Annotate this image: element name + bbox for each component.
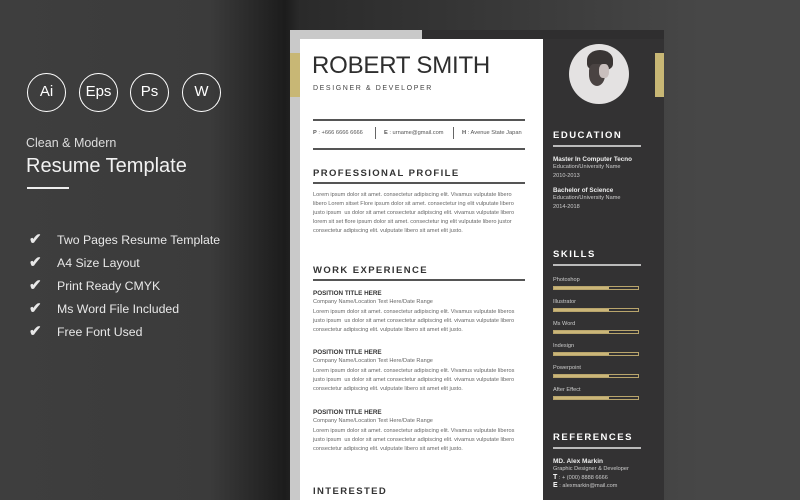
skills bbox=[553, 249, 641, 400]
education: EDUCATION bbox=[553, 130, 622, 141]
work experience: POSITION TITLE HERE bbox=[313, 409, 382, 416]
education: Education/University Name bbox=[553, 164, 620, 170]
references: REFERENCES bbox=[553, 432, 633, 443]
subtitle: Clean & Modern bbox=[26, 136, 116, 150]
work experience: WORK EXPERIENCE bbox=[313, 265, 428, 276]
feature list: A4 Size Layout bbox=[57, 256, 140, 270]
references: E : alexmarkin@mail.com bbox=[553, 482, 617, 489]
skills: Illustrator bbox=[553, 299, 576, 305]
skills: Powerpoint bbox=[553, 365, 581, 371]
contact row: P : +666 6666 6666 bbox=[313, 130, 363, 136]
work experience: POSITION TITLE HERE bbox=[313, 290, 382, 297]
feature list: ✔ bbox=[29, 300, 42, 317]
work experience: Company Name/Location Text Here/Date Range bbox=[313, 358, 433, 364]
references: T : + (000) 8888 6666 bbox=[553, 474, 608, 480]
skills: Photoshop bbox=[553, 277, 580, 283]
feature list: ✔ bbox=[29, 231, 42, 248]
work experience: Lorem ipsum dolor sit amet. consectetur adipiscing elit. Vivamus vulputate liberos justo ipsum us dolor sit amet consectetur adipiscing elit. vivamus vulputate libero consectetur adipiscing elit. vulputate libero sit amet elit justo. bbox=[313, 368, 514, 392]
professional profile: Lorem ipsum dolor sit amet. consectetur adipiscing elit. Vivamus vulputate libero libero Lorem sitset Flore ipsum dolor sit amet. consectetur ing elit vulputate libero justo ipsum us dolor sit amet consectetur adipiscing elit. vivamus vulputate libero lorem sit set flore ipsum dolor sit amet. consectetur ing elit vulputate libero justor consectetur adipiscing elit. vulputate libero sit amet elit justo. bbox=[313, 192, 514, 234]
work experience: POSITION TITLE HERE bbox=[313, 349, 382, 356]
feature list: Ms Word File Included bbox=[57, 302, 179, 316]
education: 2014-2018 bbox=[553, 204, 580, 210]
professional profile: PROFESSIONAL PROFILE bbox=[313, 168, 460, 179]
education: 2010-2013 bbox=[553, 173, 580, 179]
title: Resume Template bbox=[26, 155, 187, 177]
gold accent left bbox=[290, 53, 300, 97]
format icons: Ai bbox=[40, 83, 53, 100]
professional profile bbox=[312, 168, 525, 234]
skills: Ms Word bbox=[553, 321, 575, 327]
role: DESIGNER & DEVELOPER bbox=[313, 85, 433, 92]
back sheet bbox=[290, 30, 422, 500]
resume main page bbox=[300, 39, 543, 500]
feature list: ✔ bbox=[29, 277, 42, 294]
skills: SKILLS bbox=[553, 249, 596, 260]
contact row: E : urname@gmail.com bbox=[384, 130, 444, 136]
references bbox=[553, 432, 641, 489]
feature list: Free Font Used bbox=[57, 325, 142, 339]
work experience bbox=[312, 265, 525, 452]
interested heading: INTERESTED bbox=[313, 486, 387, 497]
work experience: Lorem ipsum dolor sit amet. consectetur adipiscing elit. Vivamus vulputate liberos justo ipsum us dolor sit amet consectetur adipiscing elit. vivamus vulputate libero consectetur adipiscing elit. vulputate libero sit amet elit justo. bbox=[313, 309, 514, 333]
education: Master In Computer Tecno bbox=[553, 156, 632, 163]
feature list bbox=[29, 231, 220, 340]
skills: Indesign bbox=[553, 343, 574, 349]
feature list: ✔ bbox=[29, 323, 42, 340]
name: ROBERT SMITH bbox=[312, 52, 490, 79]
education bbox=[553, 130, 641, 210]
gold accent right bbox=[655, 53, 664, 97]
sidebar bbox=[543, 39, 664, 500]
feature list: Two Pages Resume Template bbox=[57, 233, 220, 247]
format icons: Ps bbox=[141, 83, 158, 100]
contact row: H : Avenue State Japan bbox=[462, 130, 522, 136]
format icons bbox=[27, 73, 221, 112]
format icons: W bbox=[194, 83, 209, 100]
work experience: Lorem ipsum dolor sit amet. consectetur adipiscing elit. Vivamus vulputate liberos justo ipsum us dolor sit amet consectetur adipiscing elit. vivamus vulputate libero consectetur adipiscing elit. vulputate libero sit amet elit justo. bbox=[313, 428, 514, 452]
work experience: Company Name/Location Text Here/Date Range bbox=[313, 299, 433, 305]
education: Bachelor of Science bbox=[553, 187, 613, 194]
work experience: Company Name/Location Text Here/Date Range bbox=[313, 418, 433, 424]
references: Graphic Designer & Developer bbox=[553, 466, 629, 472]
feature list: Print Ready CMYK bbox=[57, 279, 160, 293]
education: Education/University Name bbox=[553, 195, 620, 201]
feature list: ✔ bbox=[29, 254, 42, 271]
contact row bbox=[313, 119, 525, 150]
references: MD. Alex Markin bbox=[553, 458, 603, 465]
format icons: Eps bbox=[86, 83, 111, 100]
skills: After Effect bbox=[553, 387, 581, 393]
photo bbox=[569, 44, 629, 104]
